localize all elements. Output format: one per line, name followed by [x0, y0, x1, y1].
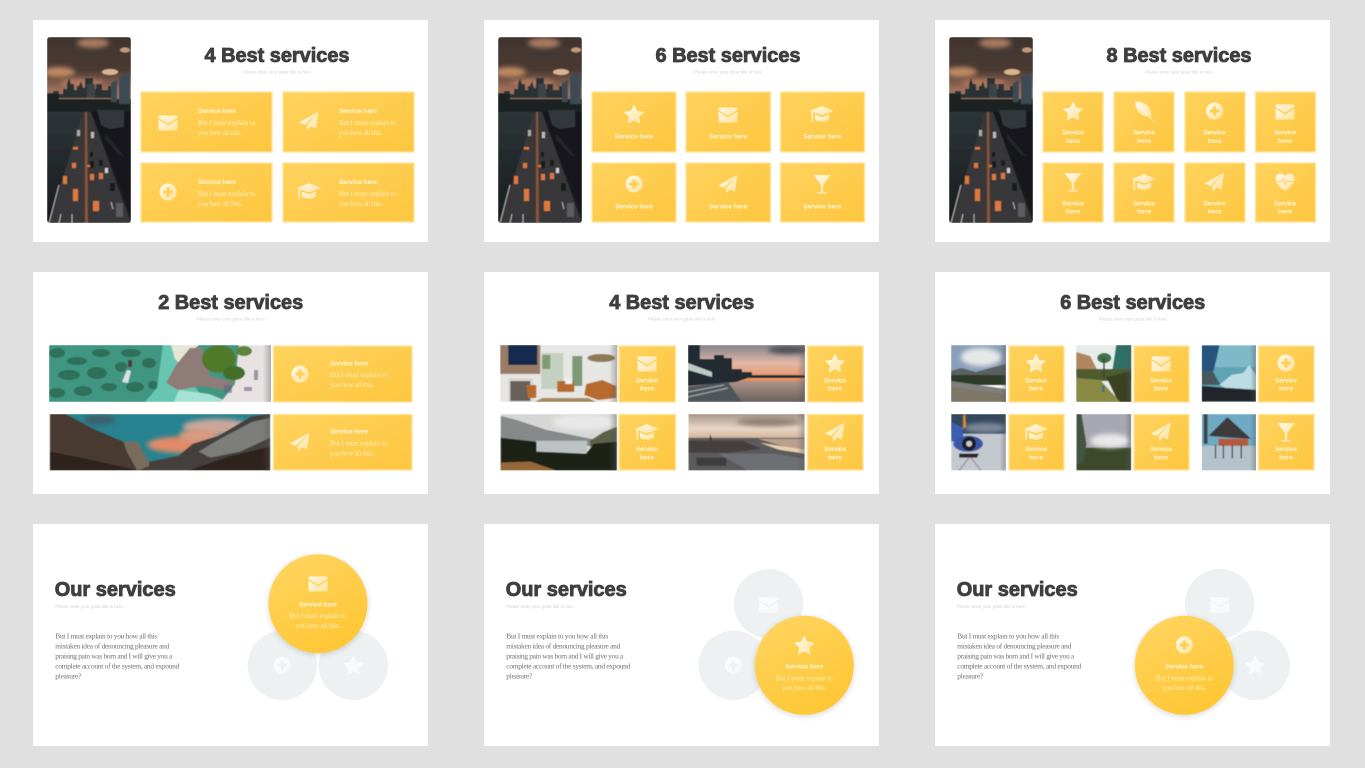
panel: 4 best services with city photo	[33, 20, 428, 242]
service card: star: here	[1066, 138, 1080, 145]
service card: plane: here	[1208, 209, 1222, 216]
service card: plus: But I must explain to	[330, 371, 388, 379]
service card: plane	[274, 414, 412, 470]
service card: graduation hat	[1114, 163, 1174, 222]
subtitle: Please enter your great title is here	[506, 604, 574, 609]
service card: mail	[619, 346, 676, 402]
body text	[506, 632, 631, 681]
service card: mail: Service	[1274, 130, 1296, 137]
service card: plus: here	[1208, 138, 1222, 145]
service card: mail: here	[640, 386, 654, 393]
service card: plane: here	[828, 454, 842, 461]
grey circle: mail	[1185, 569, 1254, 638]
photo: waterfront at dusk	[688, 345, 805, 402]
service card: plus: here	[1279, 386, 1293, 393]
service card: plus: Service	[1204, 130, 1226, 137]
service card: cocktail glass: Service	[1275, 446, 1297, 453]
photo: city highway	[494, 37, 582, 223]
service card: star: Service	[1025, 377, 1047, 384]
subtitle: Please enter your great title is here	[243, 70, 311, 74]
service card: star: Service here	[615, 134, 653, 141]
service card: graduation hat: you how all this.	[339, 200, 383, 208]
body text: pleasure?	[957, 672, 983, 681]
service card: mail: Service here	[198, 108, 236, 115]
service card: mail: here	[1154, 386, 1168, 393]
photo: living room	[500, 345, 618, 402]
subtitle: Please enter your great title is here	[957, 604, 1025, 609]
yellow circle: plus service	[1135, 616, 1234, 715]
service card: plane	[283, 92, 414, 152]
service card: star: Service	[824, 377, 846, 384]
yellow circle: star service	[755, 616, 854, 715]
grey circle: star	[1221, 631, 1290, 700]
subtitle: Please enter your great title is here	[1145, 70, 1213, 74]
service card: mail: here	[1278, 138, 1292, 145]
grey circle: plus	[699, 631, 768, 700]
service card: mail: Service	[636, 377, 658, 384]
title: 6 Best services	[1060, 292, 1205, 314]
service card: plus	[274, 346, 412, 402]
service card: cocktail glass: Service here	[803, 204, 842, 211]
service card: plane	[1134, 414, 1189, 470]
subtitle: Please enter your great title is here	[694, 70, 762, 74]
body text	[957, 632, 1082, 681]
yellow circle: mail service: you how all this.	[296, 622, 340, 630]
service card: plus: Service	[1275, 377, 1297, 384]
panel: 4 best services with medium photos	[484, 272, 879, 494]
service card: heart	[1256, 163, 1316, 222]
service card: plus: Service here	[615, 204, 653, 211]
body text: mistaken idea of denouncing pleasure and	[506, 642, 621, 651]
yellow circle: star service: Service here	[785, 664, 824, 670]
body text	[55, 632, 180, 681]
service card: graduation hat: Service here	[803, 134, 842, 141]
service card: plus: you how all this.	[330, 381, 374, 389]
panel: 2 best services with wide photos	[33, 272, 428, 494]
service card: plane: Service	[824, 446, 846, 453]
yellow circle: star service: you how all this.	[782, 684, 827, 692]
service card: mail	[1256, 92, 1316, 152]
service card: plus: you how all this.	[198, 200, 242, 208]
title: 2 Best services	[158, 292, 303, 314]
service card: heart: Service	[1274, 200, 1296, 207]
service card: plane: Service	[1150, 446, 1172, 453]
service card: star: here	[1029, 386, 1043, 393]
title: 8 Best services	[1106, 45, 1252, 67]
photo: misty lake and forest	[500, 414, 618, 470]
service card: cocktail glass	[1043, 163, 1103, 222]
title: Our services	[506, 579, 627, 601]
subtitle: Please enter your great title is here	[197, 317, 265, 322]
service card: graduation hat	[283, 163, 414, 222]
service card: plane	[1185, 163, 1245, 222]
service card: plane: Service here	[330, 429, 368, 436]
service card: plus: But I must explain to	[198, 190, 256, 198]
service card: cocktail glass: Service	[1062, 200, 1084, 207]
body text: mistaken idea of denouncing pleasure and	[55, 642, 170, 651]
service card: heart: here	[1278, 209, 1292, 216]
service card: plane: you how all this.	[339, 129, 383, 137]
photo: tropical beach from above	[49, 345, 271, 402]
service card: cocktail glass	[1258, 414, 1314, 470]
service card: graduation hat: Service	[1025, 446, 1047, 453]
service card: leaf: here	[1137, 138, 1151, 145]
service card: plus: Service here	[198, 179, 236, 186]
service card: plus: Service here	[330, 360, 368, 368]
photo: hut on snowy ground	[1202, 414, 1256, 470]
body text: praising pain was born and I will give you a	[957, 652, 1075, 661]
subtitle: Please enter your great title is here	[55, 604, 123, 609]
panel: 8 best services with city photo	[935, 20, 1330, 242]
service card: mail: you how all this.	[198, 129, 242, 137]
body text: But I must explain to you how all this	[506, 632, 608, 641]
service card: plus	[1258, 346, 1314, 402]
service card: cocktail glass: here	[1066, 209, 1080, 216]
body text: pleasure?	[55, 672, 81, 681]
title: 4 Best services	[609, 292, 754, 314]
panel: our services, mail highlighted	[33, 524, 428, 746]
panel: 6 best services with small photos	[935, 272, 1330, 494]
body text: pleasure?	[506, 672, 532, 681]
service card: graduation hat	[780, 92, 864, 152]
service card: plane: But I must explain to	[330, 440, 388, 448]
service card: star: Service	[1062, 130, 1084, 137]
service card: cocktail glass: here	[1279, 454, 1293, 461]
panel: our services, star highlighted	[484, 524, 879, 746]
service card: graduation hat: Service	[1133, 200, 1155, 207]
service card: graduation hat	[1009, 414, 1064, 470]
service card: mail: Service	[1150, 377, 1172, 384]
subtitle: Please enter your great title is here	[1099, 317, 1167, 322]
yellow circle: plus service: Service here	[1165, 664, 1204, 670]
service card: star	[1009, 346, 1064, 402]
yellow circle: plus service: you how all this.	[1162, 684, 1207, 692]
photo: city highway	[945, 37, 1033, 223]
photo: rice terraces and palms	[1076, 345, 1132, 402]
service card: plane	[686, 163, 770, 222]
photo: city highway	[43, 37, 131, 223]
service card: plus	[1185, 92, 1245, 152]
service card: graduation hat: here	[640, 454, 654, 461]
service card: graduation hat: here	[1029, 454, 1043, 461]
service card: star	[592, 92, 676, 152]
service card: graduation hat: here	[1137, 209, 1151, 216]
service card: mail	[686, 92, 770, 152]
service card: mail: But I must explain to	[198, 119, 256, 127]
photo: mountain road	[951, 345, 1006, 402]
grey circle: plus	[248, 631, 317, 700]
yellow circle: mail service	[268, 554, 368, 653]
yellow circle: mail service: But I must explain to	[290, 612, 347, 620]
body text: mistaken idea of denouncing pleasure and	[957, 642, 1072, 651]
title: 4 Best services	[204, 45, 350, 67]
service card: plane: here	[1154, 454, 1168, 461]
photo: mountain valley at sunset	[49, 414, 271, 470]
body text: complete account of the system, and expound	[55, 662, 180, 671]
body text: complete account of the system, and expound	[506, 662, 631, 671]
photo: hiker on ice	[1202, 345, 1256, 402]
service card: star: here	[828, 386, 842, 393]
service card: plane: But I must explain to	[339, 119, 396, 127]
title: Our services	[957, 579, 1078, 601]
service card: mail	[1134, 346, 1189, 402]
panel: 6 best services with city photo	[484, 20, 879, 242]
service card: graduation hat	[619, 414, 676, 470]
grey circle: star	[319, 631, 388, 700]
body text: praising pain was born and I will give you a	[506, 652, 624, 661]
service card: plane: Service	[1204, 200, 1226, 207]
photo: misty forest	[1076, 414, 1132, 470]
body text: praising pain was born and I will give you a	[55, 652, 173, 661]
panel: our services, plus highlighted	[935, 524, 1330, 746]
yellow circle: mail service: Service here	[299, 602, 337, 608]
yellow circle: plus service: But I must explain to	[1156, 674, 1213, 682]
photo: city at sunrise	[688, 414, 805, 470]
service card: graduation hat: Service here	[339, 179, 377, 186]
subtitle: Please enter your great title is here	[648, 317, 716, 322]
title: Our services	[55, 579, 176, 601]
body text: But I must explain to you how all this	[957, 632, 1059, 641]
service card: leaf	[1114, 92, 1174, 152]
grey circle: mail	[734, 569, 803, 638]
service card: plane: you how all this.	[330, 450, 374, 458]
service card: plane: Service here	[709, 204, 748, 211]
service card: star	[808, 346, 863, 402]
service card: graduation hat: But I must explain to	[339, 190, 396, 198]
service card: star	[1043, 92, 1103, 152]
service card: leaf: Service	[1133, 130, 1155, 137]
photo: aeroplane engine on runway	[951, 414, 1006, 470]
service card: mail	[141, 92, 272, 152]
title: 6 Best services	[656, 45, 800, 67]
service card: cocktail glass	[780, 163, 864, 222]
body text: complete account of the system, and expound	[957, 662, 1082, 671]
service card: plane	[808, 414, 863, 470]
service card: plus	[592, 163, 676, 222]
service card: plus	[141, 163, 272, 222]
service card: mail: Service here	[709, 134, 748, 141]
yellow circle: star service: But I must explain to	[776, 674, 833, 682]
body text: But I must explain to you how all this	[55, 632, 157, 641]
service card: graduation hat: Service	[636, 446, 658, 453]
service card: plane: Service here	[339, 108, 377, 115]
